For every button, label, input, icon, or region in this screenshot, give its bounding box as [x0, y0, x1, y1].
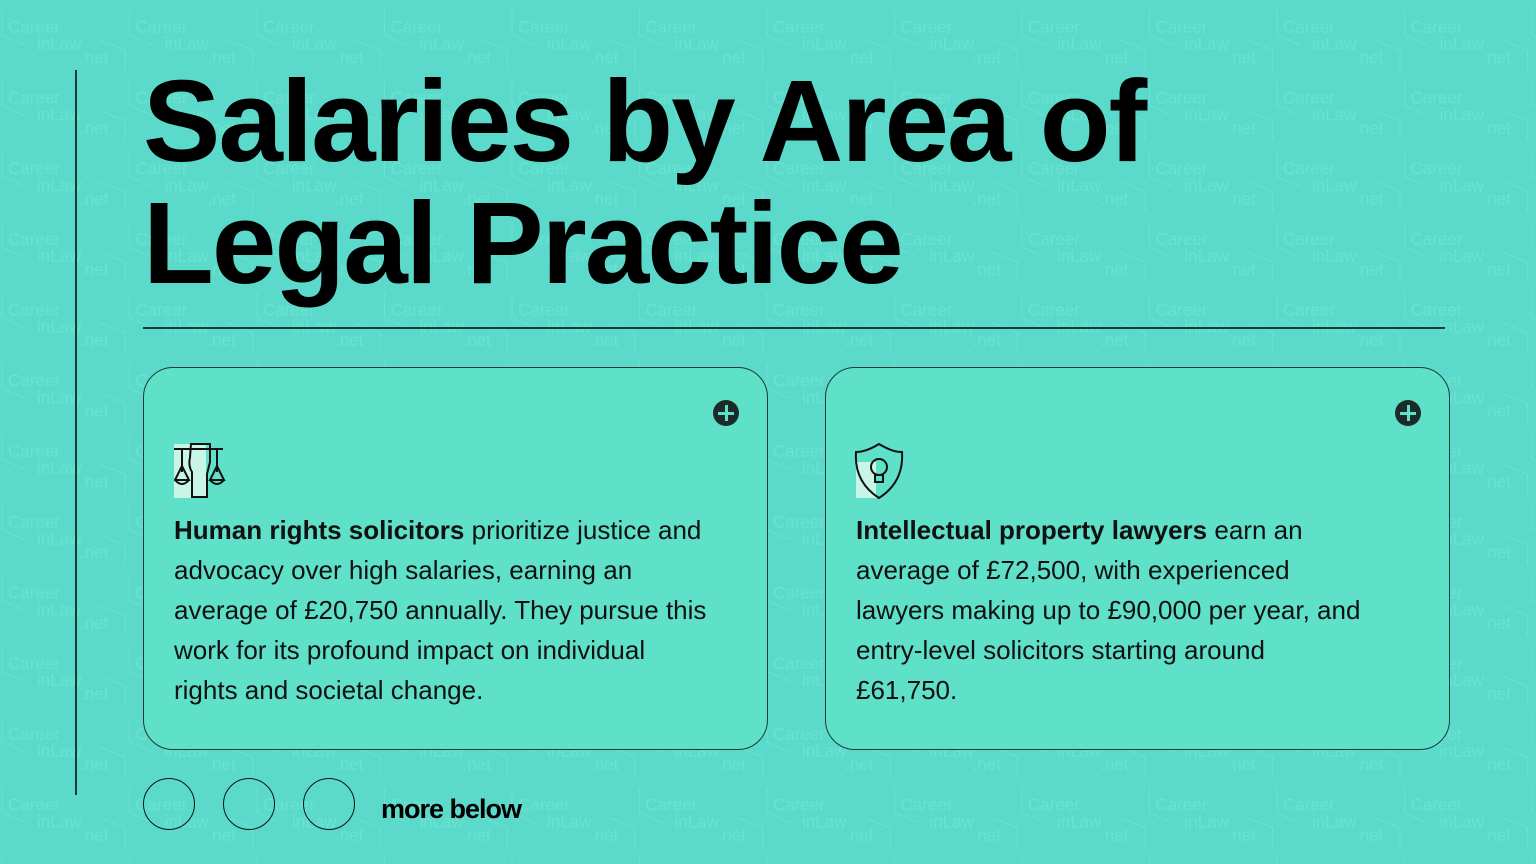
- title: Salaries by Area of: [143, 56, 1145, 186]
- title: Legal Practice: [143, 178, 902, 308]
- panel: human rights: [143, 367, 768, 750]
- text: [174, 515, 706, 705]
- text: advocacy over high salaries, earning an: [174, 555, 632, 585]
- panel: intellectual property: [825, 367, 1450, 750]
- text: rights and societal change.: [174, 675, 483, 705]
- divider: [143, 327, 1445, 328]
- icon: shield bulb: [854, 442, 904, 500]
- text: lawyers making up to £90,000 per year, and: [856, 595, 1360, 625]
- more below: more below: [381, 794, 521, 824]
- text: £61,750.: [856, 675, 957, 705]
- vertical line: [75, 70, 77, 795]
- text: average of £20,750 annually. They pursue this: [174, 595, 706, 625]
- text: average of £72,500, with experienced: [856, 555, 1290, 585]
- text: Intellectual property lawyers earn an: [856, 515, 1303, 545]
- text: work for its profound impact on individual: [174, 635, 645, 665]
- text: [856, 515, 1360, 705]
- nav circles: [143, 778, 355, 830]
- title: [143, 56, 1148, 308]
- icon: fist with scales: [174, 443, 226, 498]
- text: entry-level solicitors starting around: [856, 635, 1265, 665]
- text: Human rights solicitors prioritize justice and: [174, 515, 701, 545]
